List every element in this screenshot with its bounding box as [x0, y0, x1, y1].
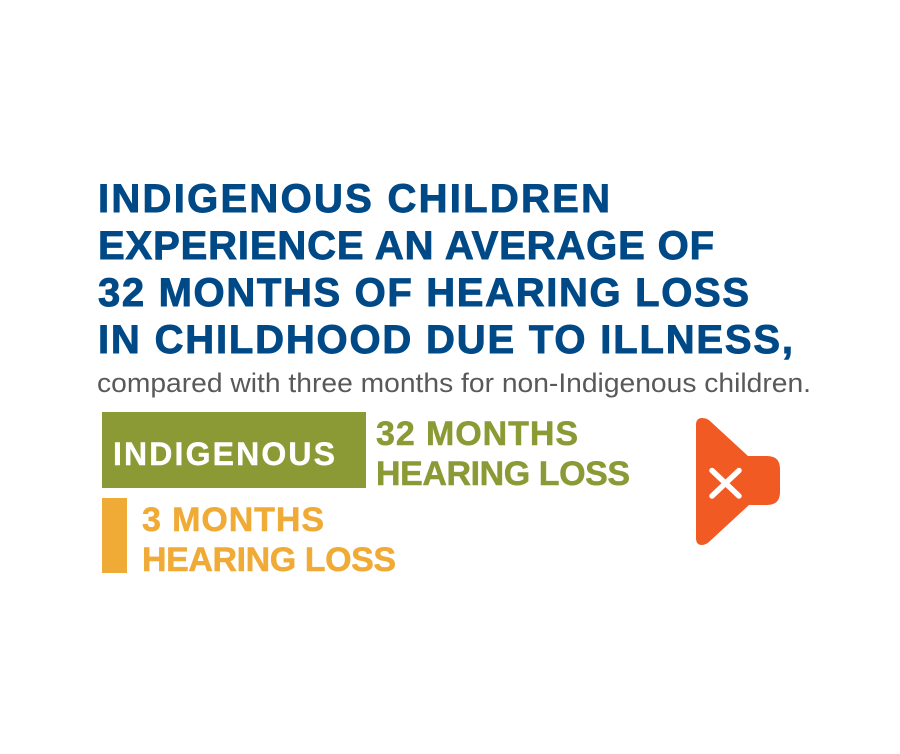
title: 32 MONTHS OF HEARING LOSS [98, 271, 749, 315]
bar label: indigenous: INDIGENOUS [113, 436, 335, 472]
label: 3 months hearing loss: HEARING LOSS [142, 541, 396, 579]
subtitle: compared with three months for non-Indigenous children. [97, 368, 811, 398]
label: 32 months hearing loss [376, 415, 630, 493]
label: 32 months hearing loss: HEARING LOSS [376, 455, 630, 493]
bar: indigenous 32 months [102, 412, 366, 488]
title: IN CHILDHOOD DUE TO ILLNESS, [98, 318, 793, 362]
title: EXPERIENCE AN AVERAGE OF [98, 224, 714, 268]
label: 32 months hearing loss: 32 MONTHS [376, 415, 578, 453]
label: 3 months hearing loss [142, 501, 396, 579]
bar: non-indigenous 3 months [102, 498, 127, 573]
title [98, 177, 793, 362]
title: INDIGENOUS CHILDREN [98, 177, 610, 221]
icon: muted speaker [696, 418, 780, 545]
label: 3 months hearing loss: 3 MONTHS [142, 501, 324, 539]
